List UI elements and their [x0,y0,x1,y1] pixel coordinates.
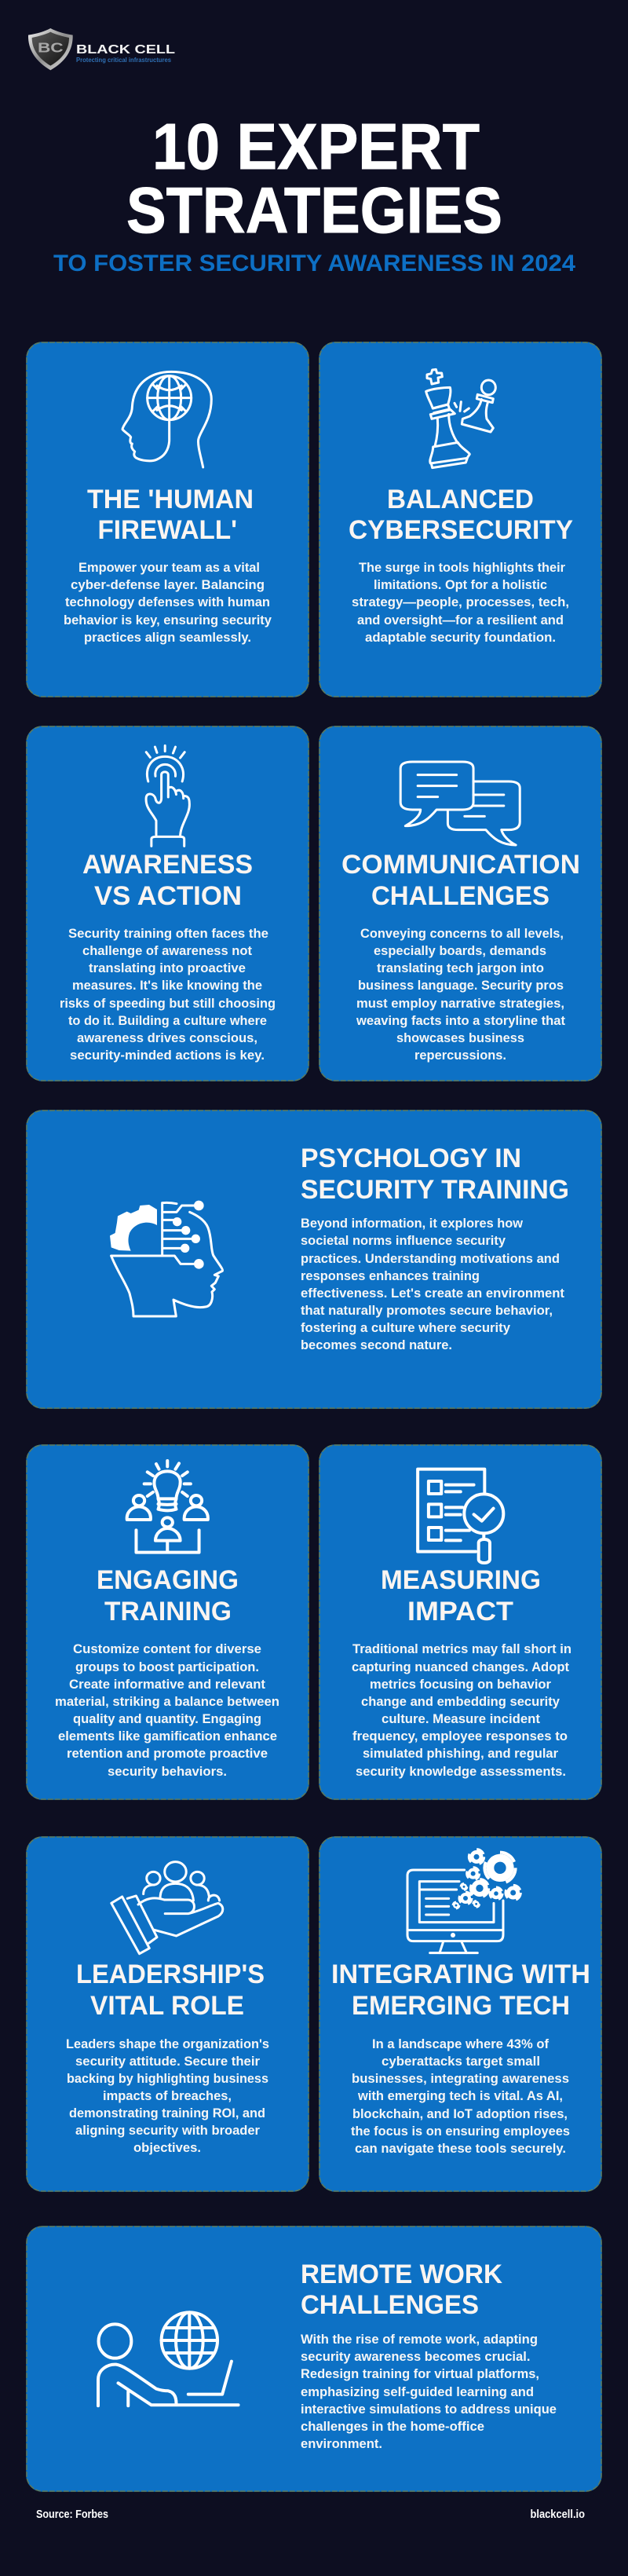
body text [352,1642,571,1779]
icon: head with gear and circuit [110,1201,223,1316]
heading: REMOTE WORK [301,2259,502,2289]
heading: CHALLENGES [371,881,550,911]
body text: impacts of breaches, [103,2089,232,2103]
body text [351,2037,570,2156]
icon: person at laptop with globe [98,2312,239,2406]
body text: must employ narrative strategies, [356,997,564,1011]
tagline: Protecting critical infrastructures [76,57,172,64]
body text: material, striking a balance between [55,1695,279,1709]
body text: Create informative and relevant [69,1678,266,1692]
body text: to do it. Building a culture where [68,1014,267,1028]
body text: cyber-defense layer. Balancing [71,578,265,592]
body text: technology defenses with human [65,595,270,609]
body text: that naturally promotes secure behavior, [301,1304,553,1318]
heading: TRAINING [104,1597,232,1626]
body text: with emerging tech is vital. As AI, [357,2089,563,2103]
heading: AWARENESS [82,850,253,880]
heading: FIREWALL' [97,515,237,545]
body text: repercussions. [414,1048,506,1063]
icon: shield [28,28,73,70]
body text: groups to boost participation. [75,1660,259,1674]
body text: challenge of awareness not [82,944,253,958]
body text [55,1642,279,1779]
logo: Black Cell [28,28,175,70]
panel: engaging training [27,1445,309,1799]
body text: adaptable security foundation. [365,631,556,645]
body text: Traditional metrics may fall short in [352,1642,571,1656]
body text [352,561,569,645]
body text: weaving facts into a storyline that [356,1014,565,1028]
body text: blockchain, and IoT adoption rises, [352,2107,568,2121]
heading [97,1565,239,1626]
body text: elements like gamification enhance [58,1729,277,1744]
heading [82,850,253,911]
footer: website: blackcell.io [531,2508,585,2521]
panel: measuring impact [319,1445,601,1799]
icon: tapping hand [146,745,189,846]
body text: Empower your team as a vital [78,561,260,575]
body text [60,927,276,1063]
body text: security attitude. Secure their [75,2055,261,2069]
body text [356,927,565,1063]
panel: balanced cybersecurity [319,342,601,697]
body text: security awareness becomes crucial. [301,2350,531,2364]
body text: cyberattacks target small [382,2055,540,2069]
body text: Leaders shape the organization's [66,2037,269,2051]
body text: business language. Security pros [358,979,564,993]
body text: societal norms influence security [301,1234,506,1248]
heading: PSYCHOLOGY IN [301,1143,521,1173]
body text [301,1217,565,1352]
body text: translating tech jargon into [377,961,544,975]
heading [87,485,254,545]
body text: demonstrating training ROI, and [69,2106,265,2120]
body text: objectives. [133,2141,201,2155]
body text: effectiveness. Let's create an environment [301,1286,565,1301]
body text: Security training often faces the [68,927,268,941]
body text: businesses, integrating awareness [352,2072,569,2086]
body text: and oversight—for a resilient and [357,613,564,628]
icon: speech bubbles [400,762,520,845]
body text: In a landscape where 43% of [372,2037,550,2051]
icon: lightbulb and people [127,1461,208,1553]
body text: culture. Measure incident [382,1712,541,1726]
heading [301,2259,502,2320]
heading: THE 'HUMAN [87,485,254,514]
title: STRATEGIES [126,174,502,247]
body text: emphasizing self-guided learning and [301,2385,534,2399]
heading: CHALLENGES [301,2290,479,2320]
heading [76,1959,265,2021]
panel: awareness vs action [27,726,309,1081]
body text: metrics focusing on behavior [370,1678,552,1692]
heading: BALANCED [387,485,534,514]
heading: LEADERSHIP'S [76,1959,265,1989]
body text: responses enhances training [301,1269,480,1283]
title [126,110,502,247]
body text: frequency, employee responses to [352,1729,568,1744]
heading: VITAL ROLE [90,1991,244,2021]
body text: security knowledge assessments. [356,1765,566,1779]
subtitle: TO FOSTER SECURITY AWARENESS IN 2024 [53,251,575,276]
icon: checklist and magnifier [418,1469,503,1563]
heading: SECURITY TRAINING [301,1175,569,1205]
body text: retention and promote proactive [67,1747,268,1761]
body text: limitations. Opt for a holistic [374,578,547,592]
body text [64,561,272,645]
body text: The surge in tools highlights their [359,561,566,575]
body text: change and embedding security [361,1695,560,1709]
body text: strategy—people, processes, tech, [352,595,569,609]
body text: Conveying concerns to all levels, [360,927,564,941]
body text: interactive simulations to address unique [301,2402,557,2417]
icon: shield: BC [38,40,64,56]
icon: chess king and pawn [426,369,495,468]
heading [301,1143,569,1205]
body text: measures. It's like knowing the [72,979,262,993]
body text: the focus is on ensuring employees [351,2124,570,2139]
heading: COMMUNICATION [341,850,580,880]
body text: practices. Understanding motivations and [301,1252,560,1266]
body text: Redesign training for virtual platforms, [301,2367,539,2381]
icon: monitor with gears [407,1850,520,1953]
body text: Beyond information, it explores how [301,1217,523,1231]
icon: hand holding team [111,1862,223,1954]
panel: remote work challenges [27,2227,601,2491]
brand name: BLACK CELL [76,43,175,57]
body text: awareness drives conscious, [77,1031,257,1045]
heading: ENGAGING [97,1565,239,1595]
body text: translating into proactive [89,961,246,975]
body text: With the rise of remote work, adapting [301,2333,538,2347]
body text: aligning security with broader [75,2124,261,2138]
panel: the human firewall [27,342,309,697]
body text [66,2037,269,2155]
body text: fostering a culture where security [301,1321,511,1335]
heading: CYBERSECURITY [349,515,573,545]
body text [301,2333,557,2451]
body text: challenges in the home-office [301,2420,484,2434]
heading [331,1959,590,2021]
body text: environment. [301,2437,382,2451]
heading [349,485,573,545]
heading: IMPACT [407,1597,513,1626]
body text: capturing nuanced changes. Adopt [352,1660,570,1674]
body text: security-minded actions is key. [70,1048,265,1063]
body text: security behaviors. [108,1765,227,1779]
body text: practices align seamlessly. [84,631,251,645]
heading: MEASURING [381,1565,541,1595]
heading: INTEGRATING WITH [331,1959,590,1989]
icon: head with globe [122,371,211,467]
panel: integrating with emerging tech [319,1837,601,2191]
body text: behavior is key, ensuring security [64,613,272,628]
body text: quality and quantity. Engaging [73,1712,261,1726]
body text: simulated phishing, and regular [363,1747,559,1761]
body text: Customize content for diverse [73,1642,261,1656]
heading: EMERGING TECH [352,1991,570,2021]
heading [381,1565,541,1626]
panel: psychology in security training [27,1111,601,1408]
heading [341,850,580,911]
body text: showcases business [396,1031,524,1045]
footer: source: Source: Forbes [36,2508,108,2521]
panel: leadership's vital role [27,1837,309,2191]
body text: becomes second nature. [301,1338,452,1352]
body text: backing by highlighting business [67,2072,268,2086]
title: 10 EXPERT [152,110,480,183]
body text: especially boards, demands [374,944,546,958]
panel: communication challenges [319,726,601,1081]
body text: can navigate these tools securely. [355,2142,566,2156]
body text: risks of speeding but still choosing [60,997,276,1011]
heading: VS ACTION [94,881,242,911]
